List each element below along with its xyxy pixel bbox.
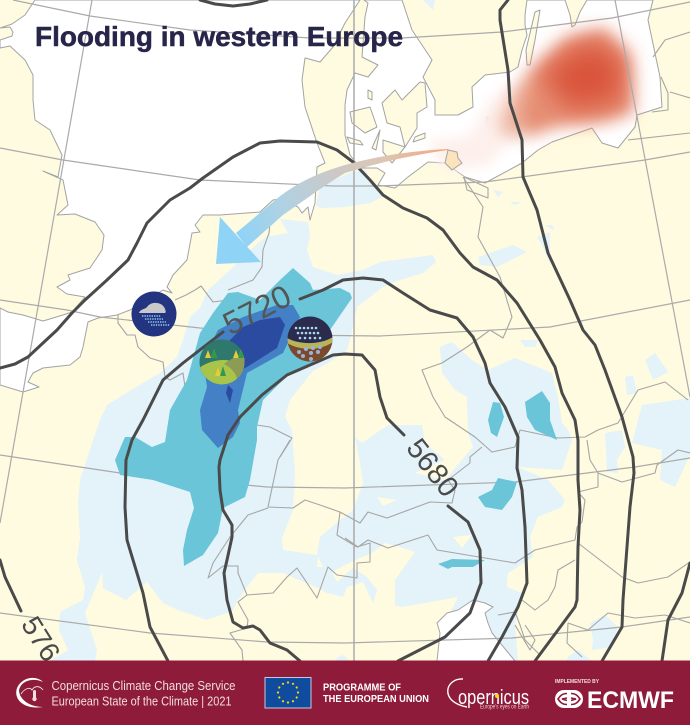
heat anomaly over the Baltic and Russia (428, 28, 634, 172)
icon: rain cloud (132, 292, 176, 336)
islands (347, 10, 540, 163)
country borders (118, 32, 690, 661)
icon: saturated hills and trees (199, 339, 246, 386)
contour label 5720: 5720 (217, 278, 297, 342)
contour label 5680: 5680 (400, 433, 465, 503)
lagoon near Rugen (445, 150, 462, 170)
land gaps inside precipitation (270, 219, 472, 567)
sea: North Sea, Channel and Atlantic (0, 0, 360, 392)
logo: Copernicus (448, 679, 529, 710)
rainfall: strong blue area (200, 305, 300, 448)
logo: Copernicus: opernicus (458, 687, 529, 709)
logo: ECMWF: ECMWF (587, 687, 674, 714)
logo: EU flag (265, 678, 311, 708)
icon: saturated soil with rain (287, 316, 333, 362)
moisture transport arrow (216, 149, 448, 264)
footer text: EU programme: THE EUROPEAN UNION (323, 693, 429, 705)
footer text: report name: European State of the Climate | 2021 (52, 694, 232, 708)
contour label 576: 576 (15, 611, 66, 667)
logo: Copernicus Climate Change Service emblem (16, 678, 43, 708)
logo: ECMWF: IMPLEMENTED BY (555, 679, 599, 685)
footer text: service name: Copernicus Climate Change Service (52, 678, 236, 693)
rainfall: darkest blue core (215, 317, 285, 403)
logo: ECMWF (555, 679, 674, 714)
rainfall: medium blue areas (115, 268, 557, 569)
title: Flooding in western Europe (35, 21, 403, 52)
logo: Copernicus: Europe's eyes on Earth (480, 704, 529, 710)
sea: Baltic (345, 0, 662, 188)
footer text: EU programme: PROGRAMME OF (323, 682, 402, 694)
sea: Adriatic (437, 600, 515, 661)
footer banner (0, 660, 690, 725)
footer text: EU programme (323, 682, 429, 705)
